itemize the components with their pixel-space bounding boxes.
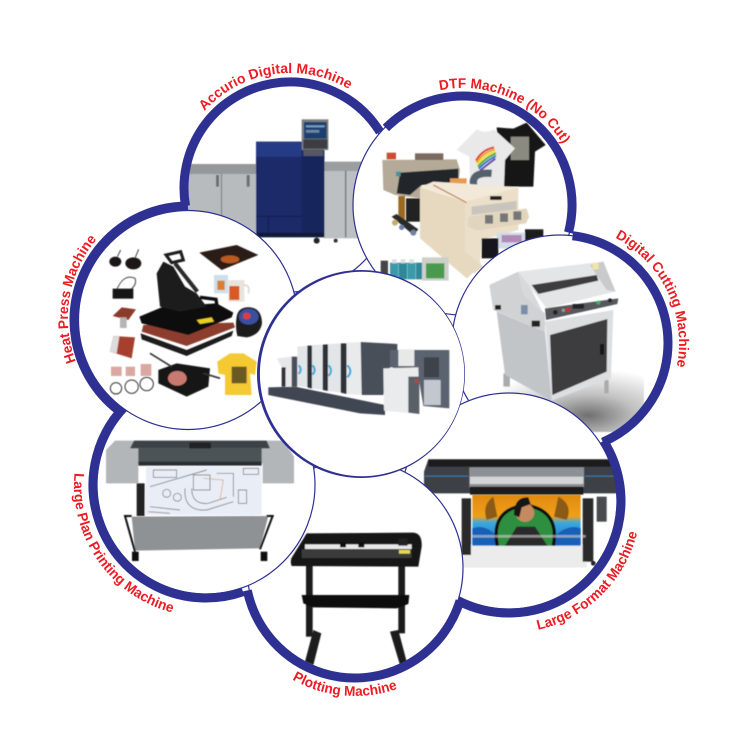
label: Heat Press Machine: Heat Press Machine <box>58 236 96 364</box>
label: Large Format Machine: Large Format Machine <box>536 532 637 630</box>
panel: Plotting Machine <box>243 467 464 698</box>
image: large format printer <box>424 459 625 568</box>
image: four colour offset press <box>268 342 449 415</box>
thick arc: Plotting <box>217 430 493 706</box>
thick arc: Large Format <box>355 347 663 655</box>
panel: Large Plan Printing Machine <box>72 410 316 612</box>
label: Large Plan Printing Machine: Large Plan Printing Machine <box>72 474 173 612</box>
thick arc: Digital Cutting <box>440 223 680 463</box>
label: Accurio Digital Machine: Accurio Digital Machine <box>200 62 351 111</box>
infographic: circular cluster of printing machines <box>58 62 690 698</box>
thick arc: Accurio <box>168 66 412 310</box>
image: Accurio digital press <box>183 119 367 244</box>
panel: DTF Machine (No Cut) <box>352 78 577 316</box>
label: DTF Machine (No Cut): DTF Machine (No Cut) <box>439 78 570 144</box>
image: wide plan printer <box>106 441 294 561</box>
label: Plotting Machine: Plotting Machine <box>293 671 396 698</box>
thick arc: DTF <box>309 51 617 359</box>
panel: Digital Cutting Machine <box>452 230 690 444</box>
panel: centre offset press <box>257 270 465 478</box>
image: vinyl plotter on stand <box>291 533 422 665</box>
label: Digital Cutting Machine: Digital Cutting Machine <box>616 230 690 367</box>
panel: Accurio Digital Machine <box>180 62 383 292</box>
image: paper cutter <box>489 261 644 432</box>
image: heat press and accessories <box>109 245 262 397</box>
panel: Large Format Machine <box>404 392 637 630</box>
thick arc: Heat Press <box>29 161 347 479</box>
panel: Heat Press Machine <box>58 202 295 430</box>
thick arc: Large Plan <box>62 341 350 629</box>
image: DTF printer, shaker and t-shirts <box>381 123 546 281</box>
